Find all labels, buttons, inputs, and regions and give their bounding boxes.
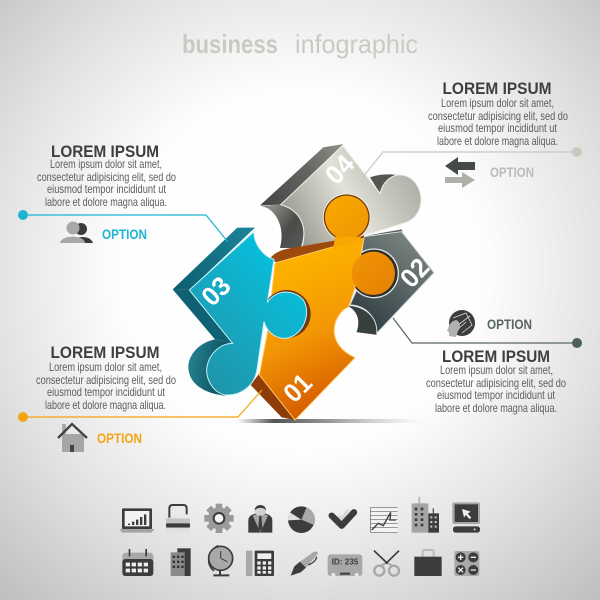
icon: math symbols (454, 551, 479, 576)
callout: 03 teal: eiusmod tempor incididunt ut (47, 182, 167, 196)
title (182, 29, 418, 59)
callout: 04 grey: LOREM IPSUM (442, 79, 552, 98)
number 04: 04 (319, 149, 360, 190)
icon: house (58, 424, 87, 452)
callout: 04 grey (362, 79, 582, 188)
icon: lock (166, 505, 190, 532)
callout: 03 teal: consectetur adipisicing elit, sed do (37, 170, 176, 184)
icon: globe clock (209, 546, 233, 575)
callout: 01 orange: eiusmod tempor incididunt ut (47, 385, 166, 399)
callout: 01 orange: labore et dolore magna aliqua. (45, 398, 166, 412)
icon: pie chart (288, 506, 315, 533)
piece 02 (348, 229, 435, 335)
number 03: 03 (195, 271, 237, 312)
callout: 02 dark: Lorem ipsum dolor sit amet, (440, 363, 553, 377)
puzzle (173, 144, 435, 420)
icon: arrows (445, 157, 475, 188)
icon: head network (447, 310, 475, 337)
callout: 02 dark: OPTION (487, 317, 532, 332)
callout: 01 orange: LOREM IPSUM (50, 343, 160, 362)
piece 04 (260, 144, 421, 248)
icon: calculator (246, 551, 274, 576)
icon: ID badge: ID: 235 (332, 556, 359, 566)
callout: 04 grey: OPTION (490, 165, 534, 180)
icon: buildings (412, 497, 439, 533)
icon: people (60, 222, 93, 243)
callout: 02 dark (393, 310, 582, 415)
icon: calendar (122, 549, 153, 576)
callout: 02 dark: LOREM IPSUM (442, 347, 550, 366)
icon: ID badge (328, 554, 362, 577)
icon: scissors (374, 551, 399, 576)
callout: 03 teal: labore et dolore magna aliqua. (45, 195, 167, 209)
callout: 02 dark: labore et dolore magna aliqua. (435, 401, 557, 415)
callout: 03 teal: LOREM IPSUM (51, 142, 159, 161)
piece 01 (251, 193, 399, 420)
callout: 03 teal (18, 142, 228, 243)
icon row (119, 497, 480, 577)
callout: 03 teal: Lorem ipsum dolor sit amet, (50, 157, 162, 171)
icon: office building (171, 548, 191, 576)
icon: briefcase (414, 550, 442, 576)
callout: 03 teal: OPTION (102, 227, 147, 242)
callout: 01 orange: Lorem ipsum dolor sit amet, (49, 360, 162, 374)
icon: businessman (248, 505, 272, 533)
icon: check mark (332, 510, 354, 526)
icon: line chart (370, 508, 398, 533)
callout: 01 orange: OPTION (97, 431, 142, 446)
number 01: 01 (277, 368, 318, 408)
icon: laptop (119, 508, 154, 533)
callout: 02 dark: eiusmod tempor incididunt ut (437, 388, 556, 402)
title: infographic (295, 29, 418, 59)
callout: 01 orange: consectetur adipisicing elit, sed do (36, 373, 176, 387)
number 02: 02 (394, 252, 435, 293)
icon: monitor (452, 502, 480, 533)
icon: gear (204, 504, 234, 533)
callout: 01 orange (18, 343, 262, 452)
callout: 04 grey: eiusmod tempor incididunt ut (438, 121, 558, 135)
icon: pen (291, 552, 318, 576)
callout: 04 grey: labore et dolore magna aliqua. (437, 134, 558, 148)
title: business (182, 29, 278, 59)
shadow under puzzle (237, 419, 423, 423)
callout: 04 grey: Lorem ipsum dolor sit amet, (441, 96, 554, 110)
piece 03 (173, 228, 311, 396)
